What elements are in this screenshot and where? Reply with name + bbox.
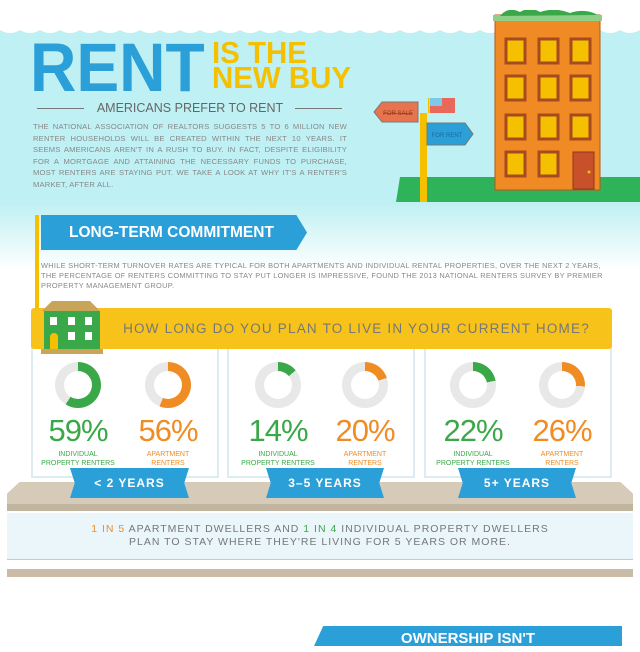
text: PROPERTY RENTERS: [436, 460, 510, 467]
ribbon: 3-5 years: [266, 468, 384, 498]
text: APARTMENT: [344, 451, 386, 458]
section banner: long-term commitment: [35, 215, 307, 308]
ribbon: 3-5 years: 3–5 YEARS: [288, 476, 362, 490]
text: APARTMENT: [541, 451, 583, 458]
summary text: PLAN TO STAY WHERE THEY'RE LIVING FOR 5 YEARS OR MORE.: [129, 536, 511, 548]
stat: 20%: 20%: [335, 413, 395, 448]
stat: 14%: 14%: [248, 413, 308, 448]
stat: 59%: 59%: [48, 413, 108, 448]
text: RENTERS: [348, 460, 382, 467]
ribbon: < 2 years: [70, 468, 189, 498]
summary text: 1 IN 5 APARTMENT DWELLERS AND 1 IN 4 INDIVIDUAL PROPERTY DWELLERS: [91, 523, 549, 535]
stat: 26%: 26%: [532, 413, 592, 448]
signpost: FOR RENT: [432, 133, 463, 139]
subtitle: AMERICANS PREFER TO RENT: [97, 101, 283, 115]
title: RENT: [30, 29, 205, 106]
signpost: [374, 98, 473, 202]
summary text: [91, 523, 549, 548]
title: [30, 29, 351, 106]
question bar: HOW LONG DO YOU PLAN TO LIVE IN YOUR CURRENT HOME?: [123, 321, 590, 336]
next section banner: OWNERSHIP ISN'T: [401, 630, 535, 647]
question bar: [31, 308, 612, 349]
panels: [31, 346, 219, 478]
icon: green house: [41, 301, 103, 354]
ribbon: 5+ years: 5+ YEARS: [484, 476, 550, 490]
title: IS THE: [212, 35, 307, 70]
illustration: building with signpost: [374, 10, 640, 202]
text: APARTMENT: [147, 451, 189, 458]
next section banner: [314, 626, 622, 646]
signpost: FOR SALE: [383, 111, 413, 117]
text: PROPERTY RENTERS: [41, 460, 115, 467]
text: INDIVIDUAL: [258, 451, 298, 458]
ribbon: < 2 years: < 2 YEARS: [94, 476, 165, 490]
hero background: [0, 0, 640, 270]
text: INDIVIDUAL: [453, 451, 493, 458]
text: PROPERTY RENTERS: [241, 460, 315, 467]
shelf base: [7, 482, 633, 577]
section banner: long-term commitment: LONG-TERM COMMITMENT: [69, 224, 274, 241]
ribbon: 5+ years: [458, 468, 576, 498]
donut charts: [55, 362, 101, 408]
text: INDIVIDUAL: [58, 451, 98, 458]
stat: 22%: 22%: [443, 413, 503, 448]
ground: [396, 177, 640, 202]
intro paragraph: THE NATIONAL ASSOCIATION OF REALTORS SUGGESTS 5 TO 6 MILLION NEW RENTER HOUSEHOLDS WILL BE CREATED WITHIN THE NEXT 10 YEARS. IT SEEMS AMERICANS AREN'T IN A RUSH TO BUY. IN FACT, DESPITE ELIGIBILITY FOR A MORTGAGE AND ATTAINING THE NECESSARY FUNDS TO PURCHASE, MOST RENTERS ARE STAYING PUT. WE TAKE A LOOK AT WHY IT'S A RENTER'S MARKET, AFTER ALL.: [33, 122, 347, 188]
stat: 56%: 56%: [138, 413, 198, 448]
section paragraph: WHILE SHORT-TERM TURNOVER RATES ARE TYPICAL FOR BOTH APARTMENTS AND INDIVIDUAL RENTAL PROPERTIES, OVER THE NEXT 2 YEARS, THE PERCENTAGE OF RENTERS COMMITTING TO STAY PUT LONGER IS IMPRESSIVE, FOUND THE 2013 NATIONAL RENTERS SURVEY BY PREMIER PROPERTY MANAGEMENT GROUP.: [41, 261, 603, 290]
building: [493, 9, 602, 190]
title: NEW BUY: [212, 60, 351, 95]
text: RENTERS: [545, 460, 579, 467]
text: RENTERS: [151, 460, 185, 467]
